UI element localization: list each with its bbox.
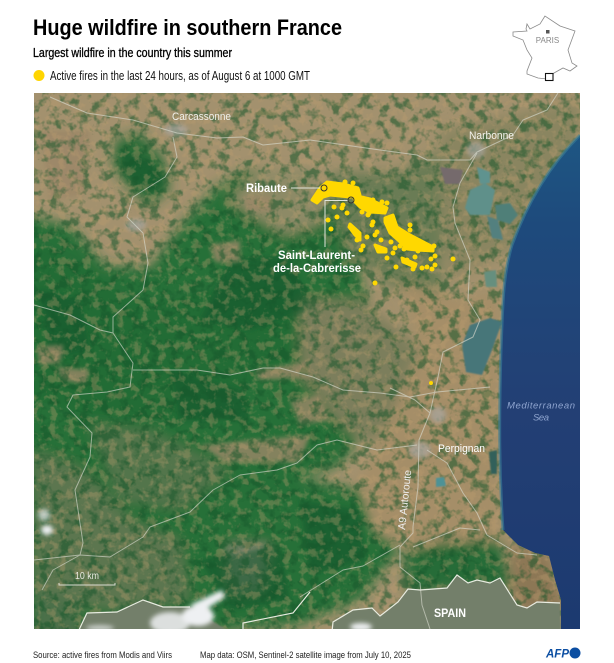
logo: AFP <box>545 646 580 660</box>
label: SPAIN: SPAIN <box>434 606 466 620</box>
label: Perpignan: Perpignan <box>438 443 485 455</box>
locator map: France <box>513 16 577 80</box>
roads <box>34 93 558 629</box>
land colour masses <box>20 93 580 640</box>
clouds <box>38 509 372 634</box>
label: Saint-Laurent-de-la-Cabrerisse with leader <box>273 197 361 275</box>
label: Ribaute with leader <box>246 183 328 192</box>
texture <box>34 93 580 629</box>
cities <box>126 124 485 458</box>
coast strip <box>500 135 580 530</box>
Spain <box>78 575 561 632</box>
fire detections <box>312 180 456 385</box>
map data note: Map data: OSM, Sentinel-2 satellite image from July 10, 2025 <box>200 650 411 661</box>
source note: Source: active fires from Modis and Viirs <box>33 650 172 661</box>
scale bar: 10 km: 10 km <box>75 571 99 582</box>
sea <box>500 135 580 629</box>
label: Mediterranean Sea: Sea <box>533 412 549 424</box>
label: Narbonne: Narbonne <box>469 130 514 142</box>
lagoons <box>436 167 518 487</box>
logo: AFP: AFP <box>545 646 570 660</box>
title: Huge wildfire in southern France <box>33 15 342 40</box>
subtitle: Largest wildfire in the country this summer <box>33 46 232 60</box>
dark forest highlights <box>40 150 365 610</box>
label: Ribaute with leader: Ribaute <box>246 183 287 195</box>
label: Saint-Laurent-de-la-Cabrerisse with leader: de-la-Cabrerisse <box>273 263 361 275</box>
locator map: France: PARIS <box>536 36 559 45</box>
brown clearings <box>37 130 330 462</box>
label: Mediterranean Sea <box>507 402 575 420</box>
label: A9 Autoroute: A9 Autoroute <box>396 469 414 530</box>
legend: active fires: Active fires in the last 24 hours, as of August 6 at 1000 GMT <box>50 69 310 83</box>
label: Saint-Laurent-de-la-Cabrerisse with leader: Saint-Laurent- <box>278 250 355 262</box>
border: Spain <box>78 575 560 632</box>
label: Carcassonne: Carcassonne <box>172 111 231 123</box>
scale bar: 10 km <box>59 571 115 585</box>
map: satellite image <box>20 93 580 640</box>
label: Mediterranean Sea: Mediterranean <box>507 400 575 412</box>
